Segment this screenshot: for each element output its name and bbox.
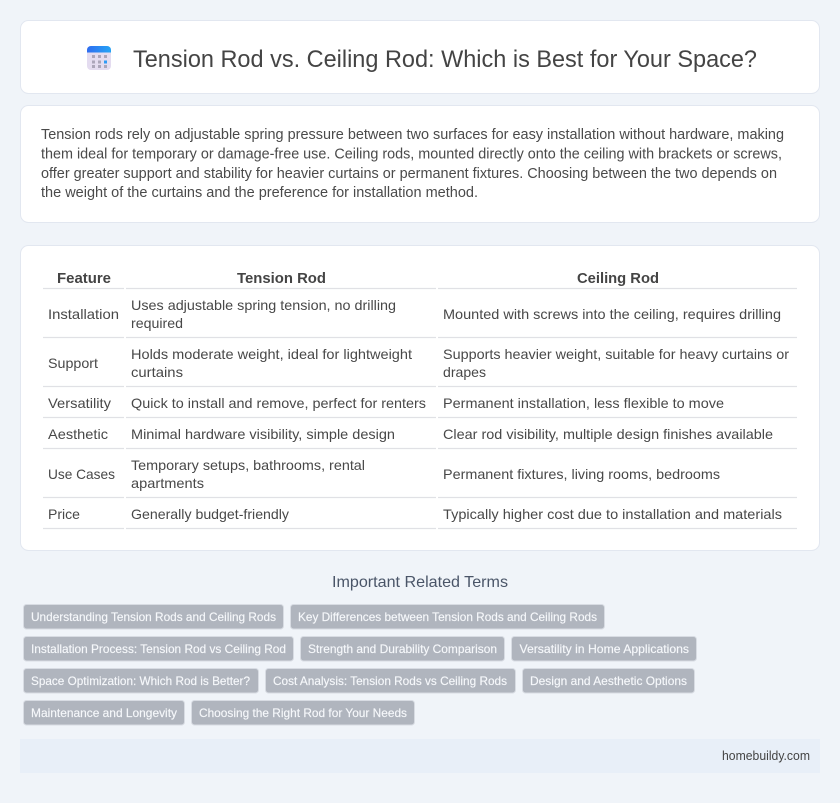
table row: aesthetic — [48, 426, 773, 442]
tag: maintenance: Maintenance and Longevity — [31, 706, 177, 720]
tag: understanding: Understanding Tension Rods and Ceiling Rods — [31, 610, 276, 624]
tag: cost analysis: Cost Analysis: Tension Rods vs Ceiling Rods — [273, 674, 507, 688]
table row: price: Price — [48, 506, 80, 522]
table row: use cases: Permanent fixtures, living rooms, bedrooms — [443, 466, 720, 482]
panel: introduction — [20, 106, 820, 222]
table row: versatility: Versatility — [48, 395, 111, 411]
table row: use cases: Use Cases — [48, 466, 115, 482]
table row: versatility: Quick to install and remove, perfect for renters — [131, 395, 426, 411]
table row: use cases: apartments — [131, 475, 204, 491]
tag: key differences — [290, 604, 604, 629]
table row: use cases — [48, 457, 720, 491]
tag: space optimization — [24, 668, 258, 693]
tag: versatility — [512, 636, 696, 661]
table header row: Ceiling Rod — [577, 271, 659, 287]
table row: aesthetic: Clear rod visibility, multiple design finishes available — [443, 426, 773, 442]
tag: design: Design and Aesthetic Options — [530, 674, 687, 688]
panel: header — [20, 20, 820, 94]
heading: related terms: Important Related Terms — [332, 574, 508, 591]
table header row: Feature — [57, 271, 111, 287]
table header row: Tension Rod — [237, 271, 326, 287]
tag: strength: Strength and Durability Comparison — [308, 642, 497, 656]
table row: support: Supports heavier weight, suitable for heavy curtains or — [443, 346, 789, 362]
tag: key differences: Key Differences between Tension Rods and Ceiling Rods — [298, 610, 597, 624]
footer — [20, 739, 820, 773]
table row: support: drapes — [443, 364, 486, 380]
tag: installation process — [24, 636, 294, 661]
table row: price — [48, 506, 782, 522]
text block: introduction paragraph: them ideal for temporary or damage-free use. Ceiling rods, mounted directly onto the ceiling with brackets or screws, — [41, 146, 782, 162]
table row: support: curtains — [131, 364, 183, 380]
table row: installation: Uses adjustable spring tension, no drilling — [131, 297, 396, 313]
text block: introduction paragraph — [41, 127, 784, 201]
text block: introduction paragraph: Tension rods rely on adjustable spring pressure between two surfaces for easy installation without hardware, making — [41, 127, 784, 143]
tag: design — [522, 668, 694, 693]
tag: strength — [300, 636, 504, 661]
related term tags — [24, 604, 696, 725]
panel: comparison table — [20, 246, 820, 550]
text block: introduction paragraph: offer greater support and stability for heavier curtains or permanent fixtures. Choosing between the two depends on — [41, 166, 777, 182]
table row: support: Support — [48, 355, 98, 371]
table row: aesthetic: Minimal hardware visibility, simple design — [131, 426, 395, 442]
footer source text: homebuildy.com — [722, 749, 810, 763]
table row: price: Typically higher cost due to installation and materials — [443, 506, 782, 522]
table row: support — [48, 346, 789, 380]
title: Tension Rod vs. Ceiling Rod: Which is Best for Your Space? — [133, 46, 757, 73]
table row: installation — [48, 297, 781, 331]
table header row — [57, 271, 659, 287]
table row: support: Holds moderate weight, ideal for lightweight — [131, 346, 412, 362]
table row: installation: Installation — [48, 306, 119, 322]
tag: space optimization: Space Optimization: Which Rod is Better? — [31, 674, 250, 688]
tag: versatility: Versatility in Home Applications — [520, 642, 689, 656]
tag: choosing: Choosing the Right Rod for Your Needs — [199, 706, 407, 720]
tag: maintenance — [24, 700, 184, 725]
table row: installation: required — [131, 315, 183, 331]
table row: installation: Mounted with screws into the ceiling, requires drilling — [443, 306, 781, 322]
tag: cost analysis — [266, 668, 516, 693]
table row: versatility: Permanent installation, less flexible to move — [443, 395, 724, 411]
text block: introduction paragraph: the weight of the curtains and the preference for installation method. — [41, 185, 478, 201]
tag: installation process: Installation Process: Tension Rod vs Ceiling Rod — [31, 642, 286, 656]
icon: calendar — [87, 46, 111, 70]
tag: choosing — [192, 700, 414, 725]
table row: price: Generally budget-friendly — [131, 506, 289, 522]
tag: understanding — [24, 604, 284, 629]
table row: aesthetic: Aesthetic — [48, 426, 108, 442]
table row: use cases: Temporary setups, bathrooms, rental — [131, 457, 365, 473]
table row: versatility — [48, 395, 724, 411]
